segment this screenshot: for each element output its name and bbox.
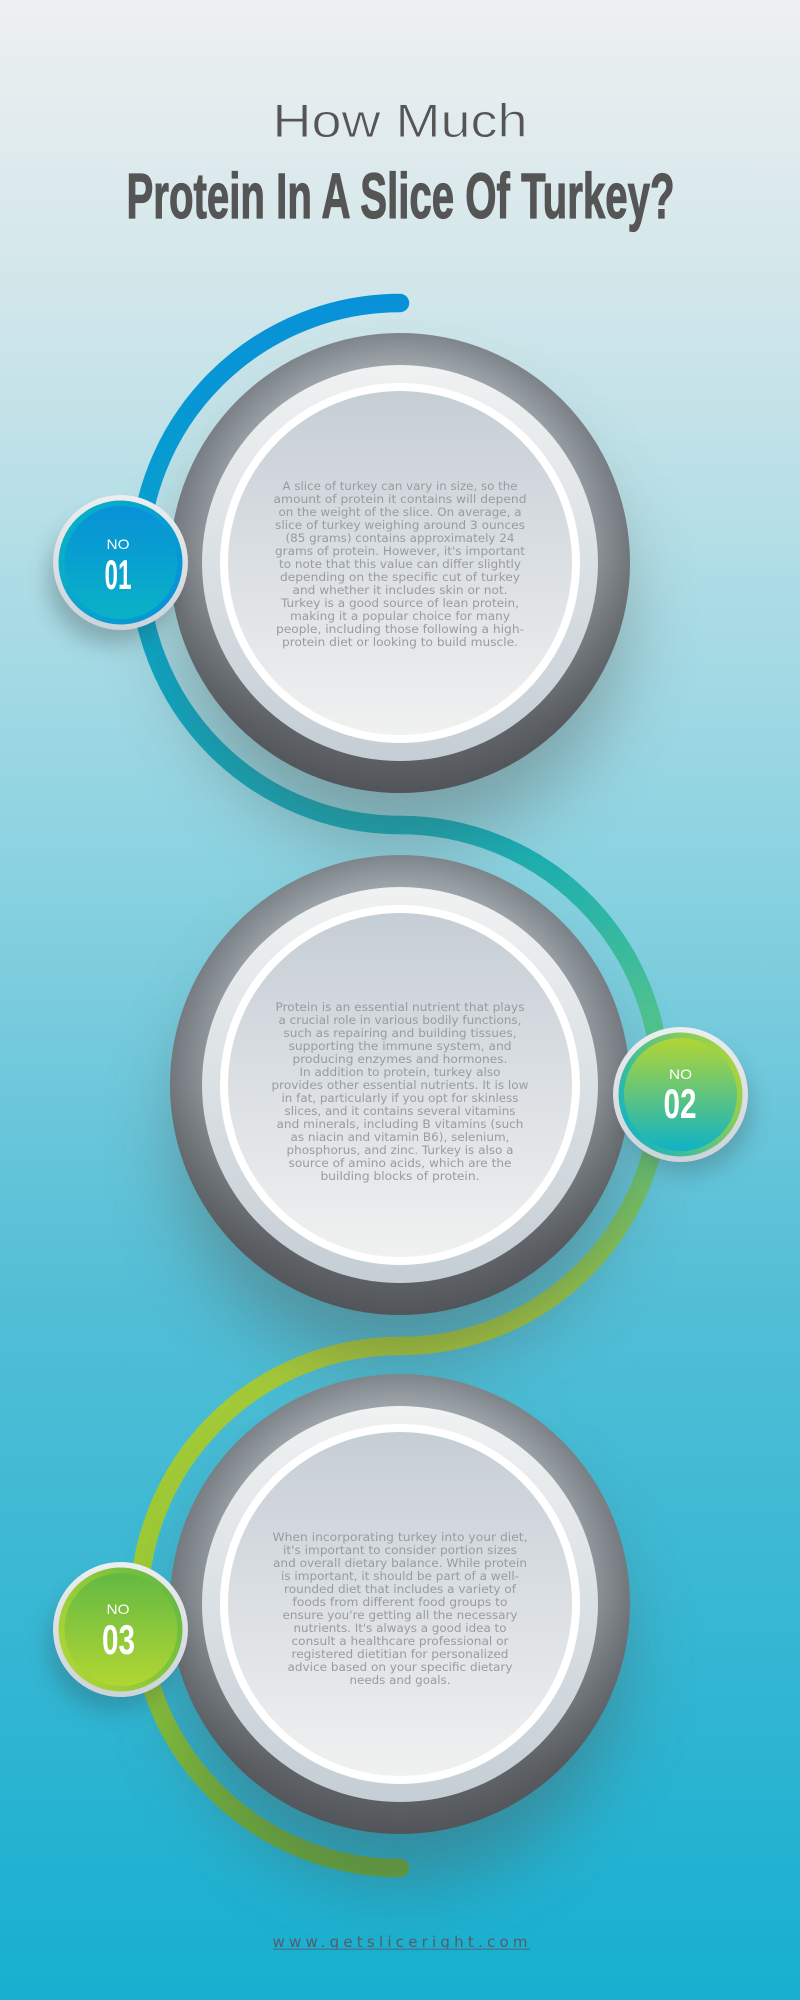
text block 3: foods from different food groups to [292, 1595, 508, 1609]
text block 1: and whether it includes skin or not. [292, 583, 508, 597]
text block 2: phosphorus, and zinc. Turkey is also a [286, 1143, 514, 1157]
title line: How Much: How Much [272, 94, 528, 147]
text block 1: depending on the specific cut of turkey [280, 570, 520, 584]
text block 3: registered dietitian for personalized [292, 1647, 508, 1661]
text block 3: When incorporating turkey into your diet, [272, 1530, 528, 1544]
text block 2: provides other essential nutrients. It is low [272, 1078, 529, 1092]
text block 3: needs and goals. [350, 1673, 450, 1687]
panel: circle 2 [170, 855, 630, 1315]
text block 3: it's important to consider portion sizes [283, 1543, 517, 1557]
footer url: www.getsliceright.com [272, 1933, 528, 1951]
panel: circle 3 [170, 1374, 630, 1834]
text block 3 [272, 1530, 528, 1687]
text block 2: a crucial role in various bodily functions, [278, 1013, 522, 1027]
text block 1: making it a popular choice for many [290, 609, 510, 623]
label NO: NO [106, 536, 130, 552]
text block 1: to note that this value can differ slightly [279, 557, 521, 571]
text block 3: ensure you're getting all the necessary [282, 1608, 518, 1622]
text block 2 [272, 1000, 529, 1183]
text block 2: In addition to protein, turkey also [300, 1065, 500, 1079]
arc 1: blue [139, 303, 400, 825]
number 03: 03 [102, 1616, 135, 1663]
circle shadows [178, 396, 622, 1881]
text block 3: advice based on your specific dietary [288, 1660, 513, 1674]
text block 2: slices, and it contains several vitamins [284, 1104, 516, 1118]
label NO: NO [106, 1601, 130, 1617]
text block 3: nutrients. It's always a good idea to [294, 1621, 506, 1635]
text block 1: A slice of turkey can vary in size, so the [282, 479, 518, 493]
arc 3: lime to green [139, 1346, 400, 1868]
text block 1 [274, 479, 526, 649]
text block 2: and minerals, including B vitamins (such [276, 1117, 524, 1131]
text block 2: building blocks of protein. [320, 1169, 480, 1183]
text block 1: on the weight of the slice. On average, a [278, 505, 522, 519]
badge 01 [48, 495, 188, 644]
text block 3: consult a healthcare professional or [292, 1634, 509, 1648]
text block 1: Turkey is a good source of lean protein, [280, 596, 519, 610]
text block 2: as niacin and vitamin B6), selenium, [290, 1130, 510, 1144]
text block 1: slice of turkey weighing around 3 ounces [275, 518, 525, 532]
text block 2: source of amino acids, which are the [288, 1156, 512, 1170]
text block 1: protein diet or looking to build muscle. [282, 635, 518, 649]
text block 1: amount of protein it contains will depend [274, 492, 526, 506]
text block 2: producing enzymes and hormones. [292, 1052, 508, 1066]
number 02: 02 [664, 1080, 696, 1127]
text block 1: grams of protein. However, it's important [275, 544, 525, 558]
arc 2: teal to green [400, 825, 660, 1346]
title [126, 94, 674, 232]
connector arcs [139, 303, 660, 1868]
number 01: 01 [104, 551, 132, 598]
badge 03 [48, 1562, 188, 1711]
text block 2: in fat, particularly if you opt for skinless [282, 1091, 518, 1105]
label NO: NO [669, 1066, 692, 1082]
text block 2: supporting the immune system, and [288, 1039, 512, 1053]
text block 1: people, including those following a high- [276, 622, 524, 636]
text block 2: Protein is an essential nutrient that plays [276, 1000, 524, 1014]
text block 2: such as repairing and building tissues, [284, 1026, 516, 1040]
badge 02 [613, 1027, 752, 1174]
text block 3: is important, it should be part of a well- [281, 1569, 519, 1583]
text block 1: (85 grams) contains approximately 24 [286, 531, 514, 545]
text block 3: and overall dietary balance. While protein [273, 1556, 527, 1570]
text block 3: rounded diet that includes a variety of [284, 1582, 517, 1596]
panel: circle 1 [170, 333, 630, 793]
